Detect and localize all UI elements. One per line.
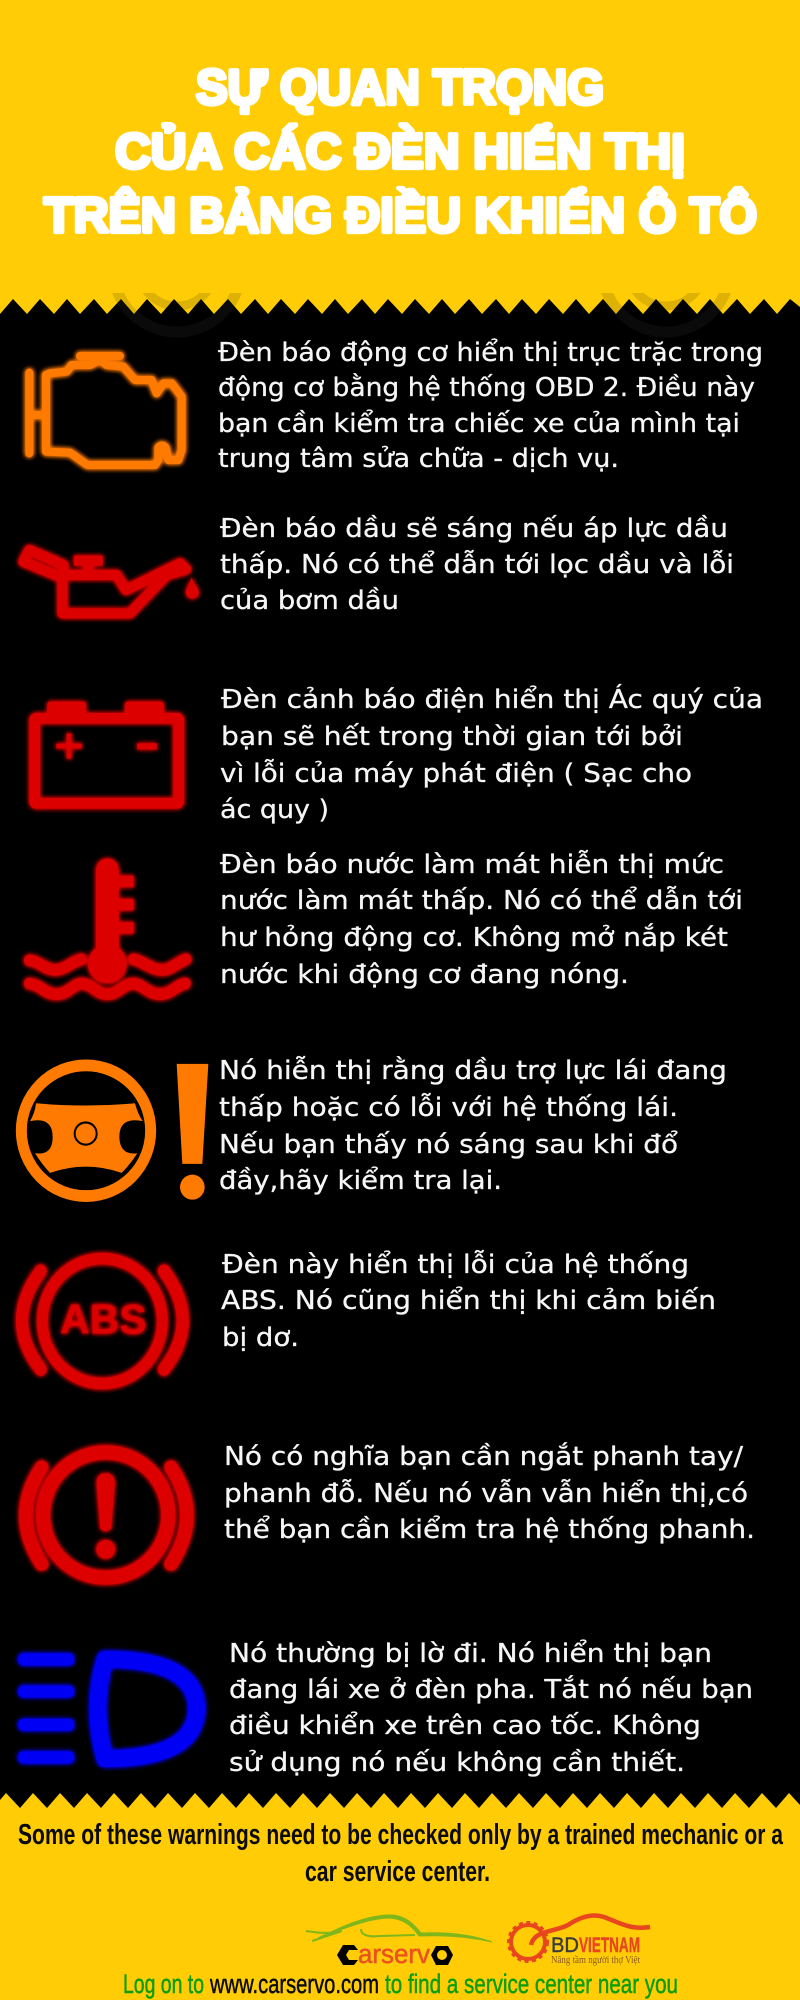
icon: ABS: ABS: [60, 1297, 147, 1343]
logo: OBD Vietnam: Nâng tầm người thợ Việt: [551, 1955, 640, 1966]
text block: oil warning: thấp. Nó có thể dẫn tới lọc dầu và lỗi: [220, 550, 734, 580]
logo: Carservo: arserv: [358, 1939, 430, 1969]
text block: battery warning: ác quy ): [220, 795, 329, 825]
logo: OBD Vietnam: [508, 1915, 650, 1966]
text block: steering warning: Nó hiễn thị rằng dầu trợ lực lái đang: [219, 1056, 727, 1086]
text block: steering warning: đầy,hãy kiểm tra lại.: [219, 1166, 502, 1196]
icon: battery: [35, 702, 179, 803]
text block: ABS warning: bị dơ.: [222, 1323, 299, 1353]
call to action: www.carservo.com: [209, 1969, 379, 1999]
text block: engine warning: trung tâm sửa chữa - dịch vụ.: [218, 444, 619, 474]
text block: battery warning: vì lỗi của máy phát điện ( Sạc cho: [220, 759, 692, 789]
title: [44, 61, 757, 243]
text block: engine warning: bạn cần kiểm tra chiếc xe của mình tại: [218, 409, 740, 439]
text block: oil warning: của bơm dầu: [220, 586, 399, 616]
text block: brake warning: [224, 1442, 755, 1545]
text block: oil warning: Đèn báo dầu sẽ sáng nếu áp lực dầu: [220, 514, 728, 544]
footer note: car service center.: [305, 1856, 490, 1888]
text block: battery warning: Đèn cảnh báo điện hiển thị Ác quý của: [221, 685, 763, 715]
title: TRÊN BẢNG ĐIỀU KHIỂN Ô TÔ: [44, 188, 757, 243]
text block: coolant warning: Đèn báo nước làm mát hiễn thị mức: [220, 850, 724, 880]
logo: Carservo: [306, 1915, 492, 1969]
text block: coolant warning: hư hỏng động cơ. Không mở nắp két: [220, 923, 728, 953]
text block: ABS warning: Đèn này hiển thị lỗi của hệ thống: [222, 1250, 689, 1280]
call to action: [123, 1969, 678, 1999]
logo: OBD Vietnam: VIETNAM: [579, 1934, 640, 1957]
text block: brake warning: Nó có nghĩa bạn cần ngắt phanh tay/: [224, 1442, 743, 1472]
text block: high beam note: sử dụng nó nếu không cần thiết.: [229, 1748, 685, 1778]
text block: engine warning: Đèn báo động cơ hiển thị trục trặc trong: [218, 338, 763, 368]
faint watermark on black: [118, 300, 720, 338]
text block: engine warning: động cơ bằng hệ thống OBD 2. Điều này: [218, 373, 755, 403]
icon: coolant temperature: [29, 859, 186, 994]
text block: engine warning: [218, 338, 763, 474]
logo: OBD Vietnam: BD: [551, 1934, 579, 1957]
icon: ABS: [22, 1259, 183, 1384]
icon: oil can: [23, 550, 199, 613]
icon: brake warning: [26, 1452, 187, 1578]
text block: oil warning: [220, 514, 734, 616]
text block: steering warning: thấp hoặc có lỗi với hệ thống lái.: [219, 1093, 678, 1123]
call to action: Log on to: [123, 1969, 204, 1999]
text block: battery warning: [220, 685, 763, 825]
text block: steering warning: [219, 1056, 727, 1196]
text block: ABS warning: ABS. Nó cũng hiển thị khi cảm biến: [221, 1286, 716, 1316]
call to action: to find a service center near you: [385, 1969, 678, 1999]
text block: coolant warning: nước làm mát thấp. Nó có thể dẫn tới: [220, 886, 743, 916]
text block: brake warning: phanh đỗ. Nếu nó vẫn vẫn hiển thị,có: [224, 1479, 748, 1509]
text block: coolant warning: [220, 850, 743, 990]
icon: high beam: [18, 1653, 197, 1763]
footer band with zigzag edge: [0, 1793, 800, 2000]
footer note: [18, 1819, 784, 1888]
title: SỰ QUAN TRỌNG: [196, 61, 604, 115]
watermark arcs: [112, 293, 731, 314]
header band with zigzag edge: [0, 0, 800, 314]
icon: check engine: [29, 356, 182, 465]
title: CỦA CÁC ĐÈN HIỂN THỊ: [115, 124, 685, 179]
text block: brake warning: thể bạn cần kiểm tra hệ thống phanh.: [224, 1515, 755, 1545]
text block: high beam note: [229, 1639, 753, 1778]
text block: high beam note: Nó thường bị lờ đi. Nó hiển thị bạn: [229, 1639, 712, 1669]
text block: high beam note: điều khiển xe trên cao tốc. Không: [229, 1711, 701, 1741]
text block: high beam note: đang lái xe ở đèn pha. Tắt nó nếu bạn: [229, 1675, 753, 1705]
text block: battery warning: bạn sẽ hết trong thời gian tới bởi: [221, 722, 683, 752]
icon: power steering warning: [21, 1064, 208, 1200]
text block: ABS warning: [221, 1250, 716, 1353]
text block: steering warning: Nếu bạn thấy nó sáng sau khi đổ: [219, 1130, 678, 1160]
text block: coolant warning: nước khi động cơ đang nóng.: [220, 960, 629, 990]
